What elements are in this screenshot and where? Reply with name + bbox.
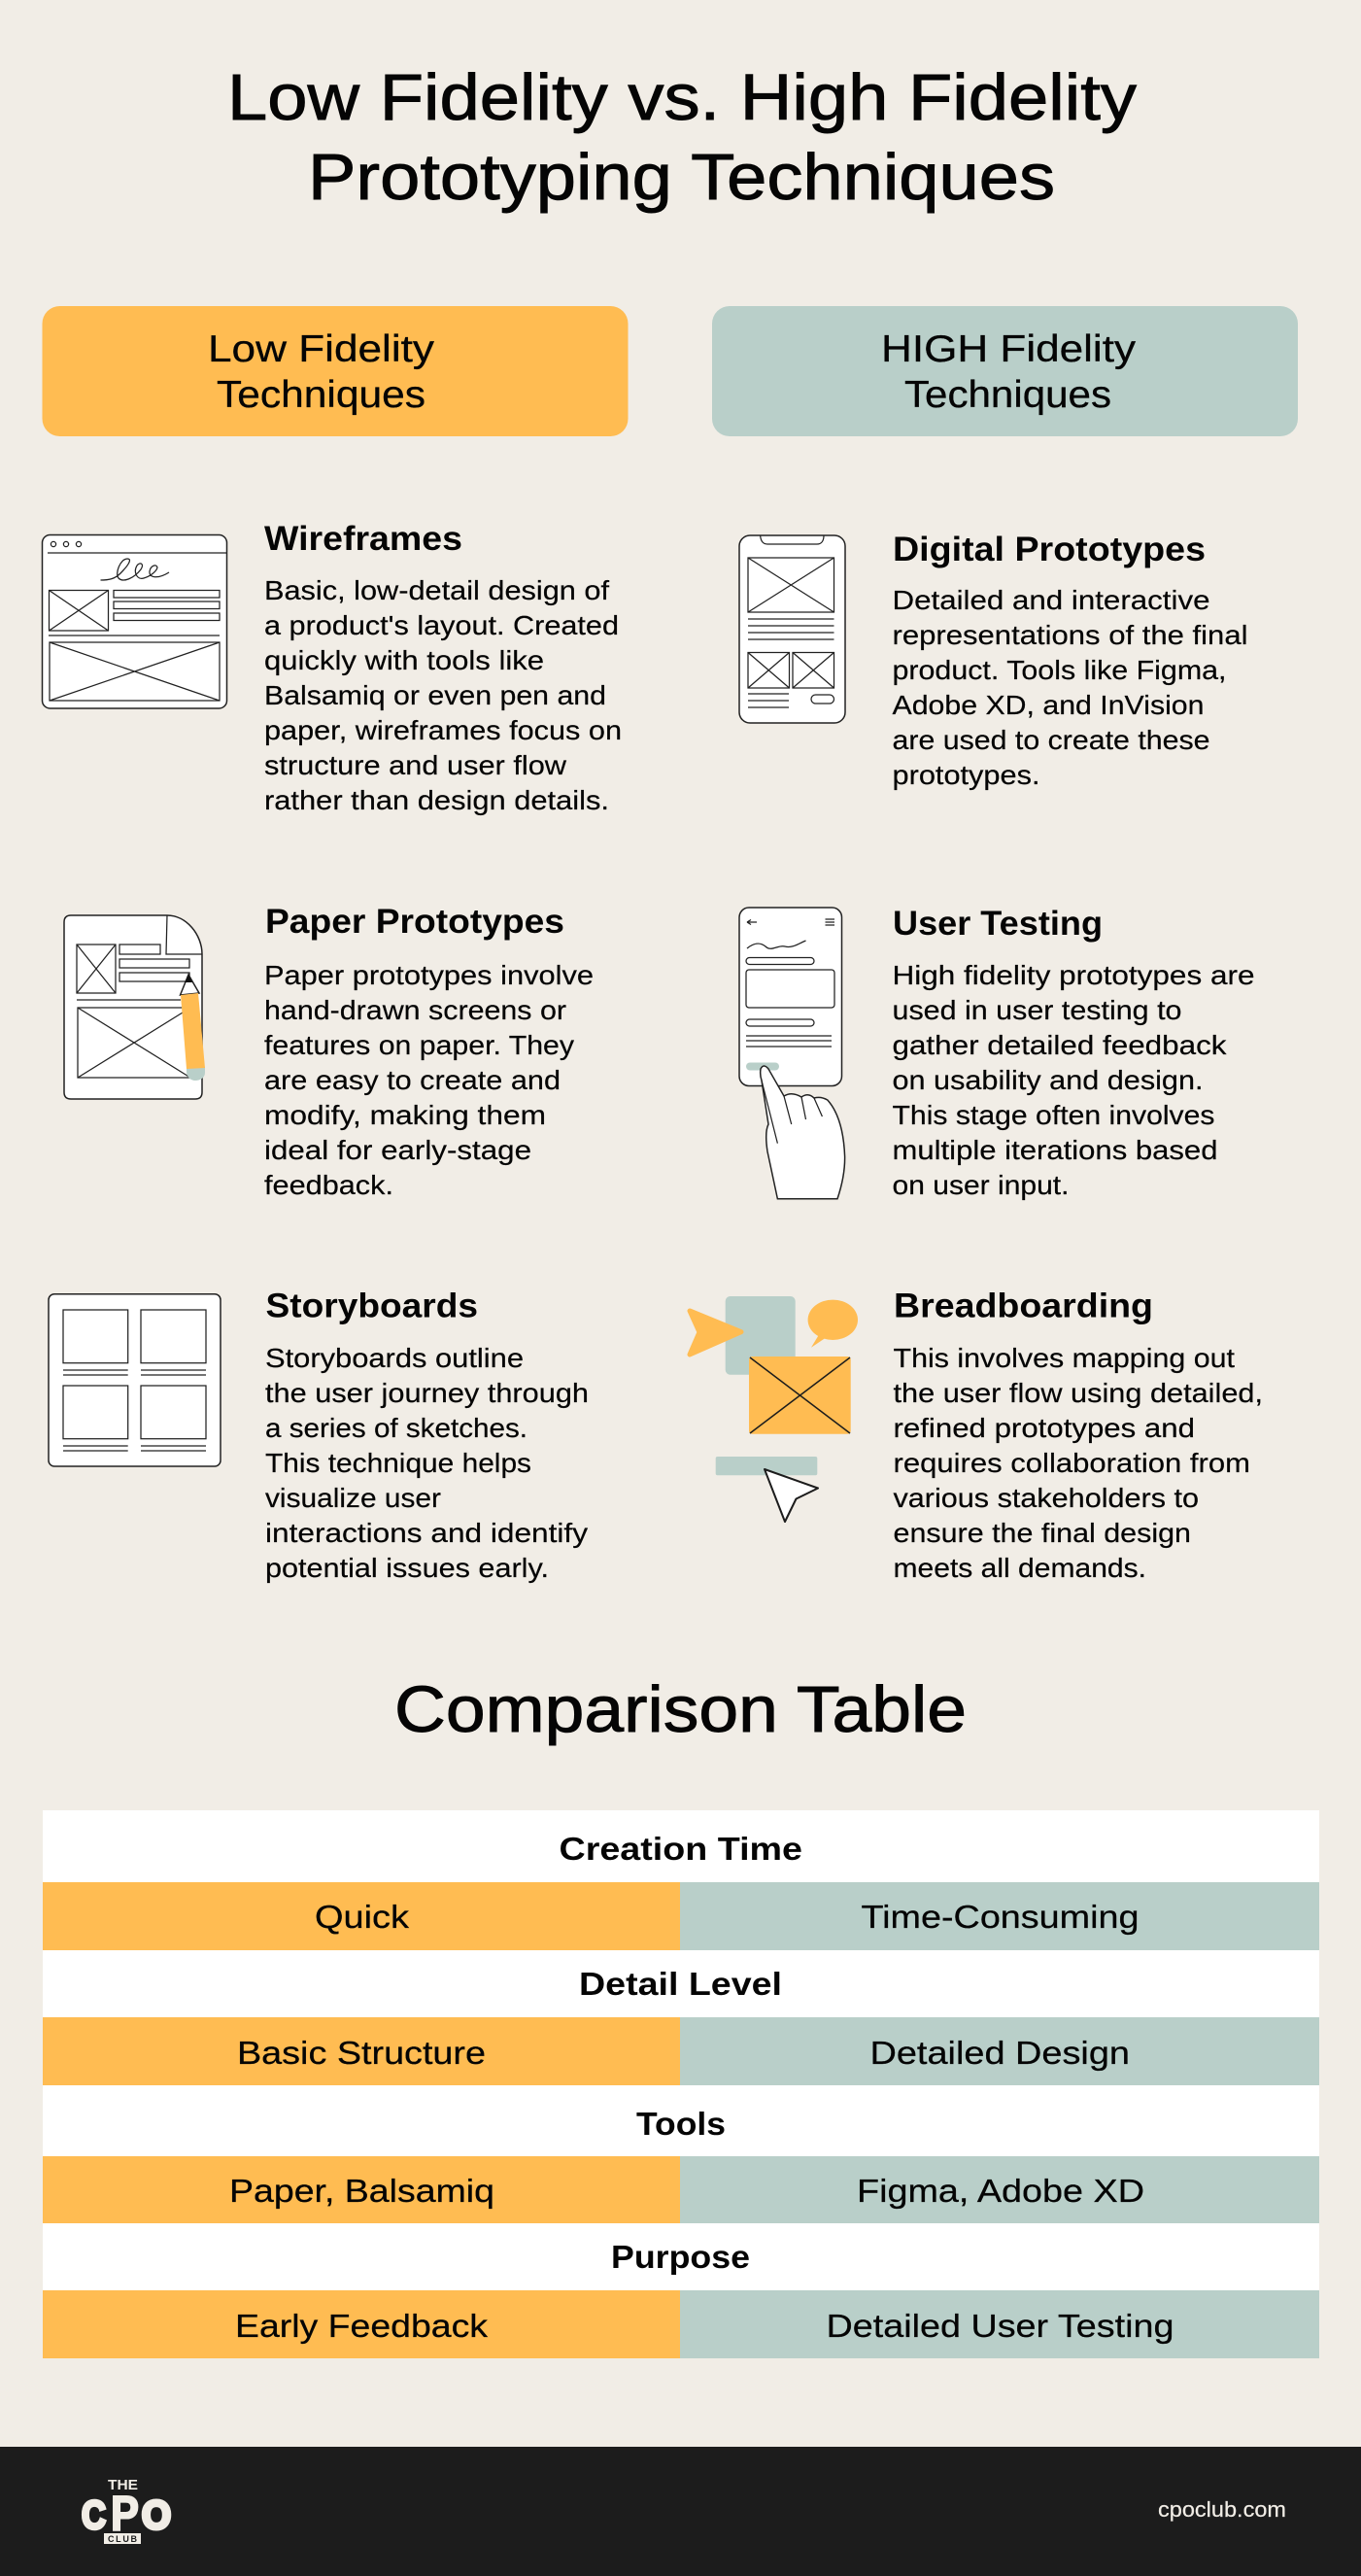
comparison table [43, 1810, 1319, 2358]
logo: The CPO Club [82, 2477, 171, 2544]
text: User Testing description: High fidelity prototypes are [892, 960, 1255, 990]
text: Storyboards description: visualize user [265, 1483, 441, 1513]
text: Wireframes description: rather than design details. [264, 785, 609, 815]
text: Wireframes description [264, 575, 622, 815]
logo: The CPO Club: P [111, 2486, 139, 2540]
text: Digital Prototypes description [892, 585, 1247, 790]
text: Breadboarding description: meets all demands. [894, 1553, 1146, 1583]
icon: flow shapes with cursor [690, 1296, 858, 1522]
text: Wireframes description: Balsamiq or even pen and [264, 680, 606, 710]
text: Breadboarding description: various stakeholders to [894, 1483, 1199, 1513]
text: Breadboarding description: This involves mapping out [894, 1343, 1235, 1373]
text: Storyboards description: This technique helps [265, 1448, 531, 1478]
text: Storyboards description [265, 1343, 589, 1583]
text: Paper Prototypes description: are easy to create and [264, 1065, 561, 1095]
text: Paper Prototypes description: Paper prototypes involve [264, 960, 594, 990]
text: Storyboards description: interactions and identify [265, 1518, 588, 1548]
row: Detail Level: Basic Structure [237, 2035, 486, 2071]
heading: Paper Prototypes: Paper Prototypes [265, 903, 564, 941]
text: Digital Prototypes description: representations of the final [892, 620, 1247, 650]
text: Digital Prototypes description: are used to create these [892, 725, 1210, 755]
logo: The CPO Club: CLUB [108, 2534, 138, 2544]
heading: Breadboarding: Breadboarding [894, 1287, 1153, 1325]
row: Detail Level: Detail Level [579, 1966, 782, 2002]
text: User Testing description: on usability and design. [892, 1065, 1203, 1095]
text: Storyboards description: a series of sketches. [265, 1413, 527, 1443]
panel: High Fidelity Techniques header: Techniques [904, 374, 1111, 416]
footer bar [0, 2447, 1361, 2576]
text: Storyboards description: the user journey through [265, 1378, 589, 1408]
text: Paper Prototypes description: modify, making them [264, 1100, 546, 1130]
text: Digital Prototypes description: prototypes. [892, 760, 1039, 790]
text: Storyboards description: potential issues early. [265, 1553, 549, 1583]
panel: Wireframes [43, 520, 622, 815]
heading: Digital Prototypes: Digital Prototypes [893, 531, 1206, 568]
row: Purpose: Purpose [611, 2239, 750, 2275]
text: User Testing description: This stage often involves [892, 1100, 1214, 1130]
row: Creation Time: Quick [315, 1899, 410, 1935]
row: Creation Time: Time-Consuming [861, 1899, 1139, 1935]
panel: Low Fidelity Techniques header: Techniques [217, 374, 425, 416]
panel: Storyboards [49, 1287, 589, 1583]
row: Tools: Figma, Adobe XD [857, 2173, 1144, 2209]
icon: phone wireframe [739, 535, 845, 723]
text: Breadboarding description [894, 1343, 1263, 1583]
text: Breadboarding description: requires collaboration from [894, 1448, 1250, 1478]
text: Paper Prototypes description: ideal for early-stage [264, 1135, 531, 1165]
text: Paper Prototypes description: features on paper. They [264, 1030, 574, 1060]
panel: Breadboarding [690, 1287, 1263, 1583]
text: Wireframes description: structure and user flow [264, 750, 567, 780]
panel: High Fidelity Techniques header: HIGH Fidelity [881, 328, 1137, 370]
title: Low Fidelity vs. High Fidelity [227, 61, 1138, 134]
row: Creation Time [43, 1831, 1319, 1950]
logo: The CPO Club: THE [108, 2477, 138, 2493]
heading: User Testing: User Testing [893, 905, 1103, 943]
panel: High Fidelity Techniques header [712, 306, 1298, 436]
text: User Testing description: gather detailed feedback [892, 1030, 1228, 1060]
icon: phone with tapping hand [739, 908, 845, 1199]
row: Creation Time: Creation Time [560, 1831, 802, 1867]
row: Tools [43, 2106, 1319, 2223]
icon: browser wireframe [43, 534, 227, 708]
logo: The CPO Club: O [142, 2492, 171, 2537]
text: Wireframes description: Basic, low-detail design of [264, 575, 609, 605]
panel: User Testing [739, 905, 1255, 1200]
title [227, 61, 1138, 214]
icon: storyboard frames [49, 1294, 221, 1466]
title: Prototyping Techniques [308, 141, 1055, 214]
row: Purpose: Detailed User Testing [826, 2308, 1174, 2344]
text: Breadboarding description: refined prototypes and [894, 1413, 1195, 1443]
row: Purpose: Early Feedback [235, 2308, 489, 2344]
row: Purpose [43, 2239, 1319, 2358]
heading: Comparison Table: Comparison Table [394, 1673, 967, 1746]
heading: Wireframes: Wireframes [264, 520, 462, 558]
text: Digital Prototypes description: product. Tools like Figma, [892, 655, 1226, 685]
text: Wireframes description: paper, wireframes focus on [264, 715, 622, 745]
logo: The CPO Club: C [82, 2492, 106, 2537]
text: Digital Prototypes description: Adobe XD, and InVision [892, 690, 1205, 720]
text: Wireframes description: a product's layout. Created [264, 610, 619, 640]
panel: Low Fidelity Techniques header [43, 306, 628, 436]
row: Tools: Paper, Balsamiq [229, 2173, 494, 2209]
row: Detail Level [43, 1966, 1319, 2085]
row: Tools: Tools [636, 2106, 726, 2142]
text: User Testing description: used in user testing to [892, 995, 1181, 1025]
text: User Testing description [892, 960, 1255, 1200]
panel: Paper Prototypes [64, 903, 594, 1200]
panel: Digital Prototypes [739, 531, 1247, 790]
text: Digital Prototypes description: Detailed and interactive [892, 585, 1210, 615]
text: Paper Prototypes description [264, 960, 594, 1200]
panel: Low Fidelity Techniques header: Low Fidelity [208, 328, 435, 370]
heading: Storyboards: Storyboards [266, 1287, 478, 1325]
text: Paper Prototypes description: hand-drawn screens or [264, 995, 566, 1025]
text: Wireframes description: quickly with tools like [264, 645, 544, 675]
row: Detail Level: Detailed Design [870, 2035, 1130, 2071]
text: Storyboards description: Storyboards outline [265, 1343, 524, 1373]
text: website: cpoclub.com [1158, 2497, 1286, 2522]
text: User Testing description: multiple iterations based [892, 1135, 1218, 1165]
text: Breadboarding description: the user flow using detailed, [894, 1378, 1263, 1408]
text: Breadboarding description: ensure the final design [894, 1518, 1191, 1548]
text: Paper Prototypes description: feedback. [264, 1170, 393, 1200]
text: User Testing description: on user input. [892, 1170, 1069, 1200]
icon: paper sheet with pencil [64, 915, 205, 1099]
